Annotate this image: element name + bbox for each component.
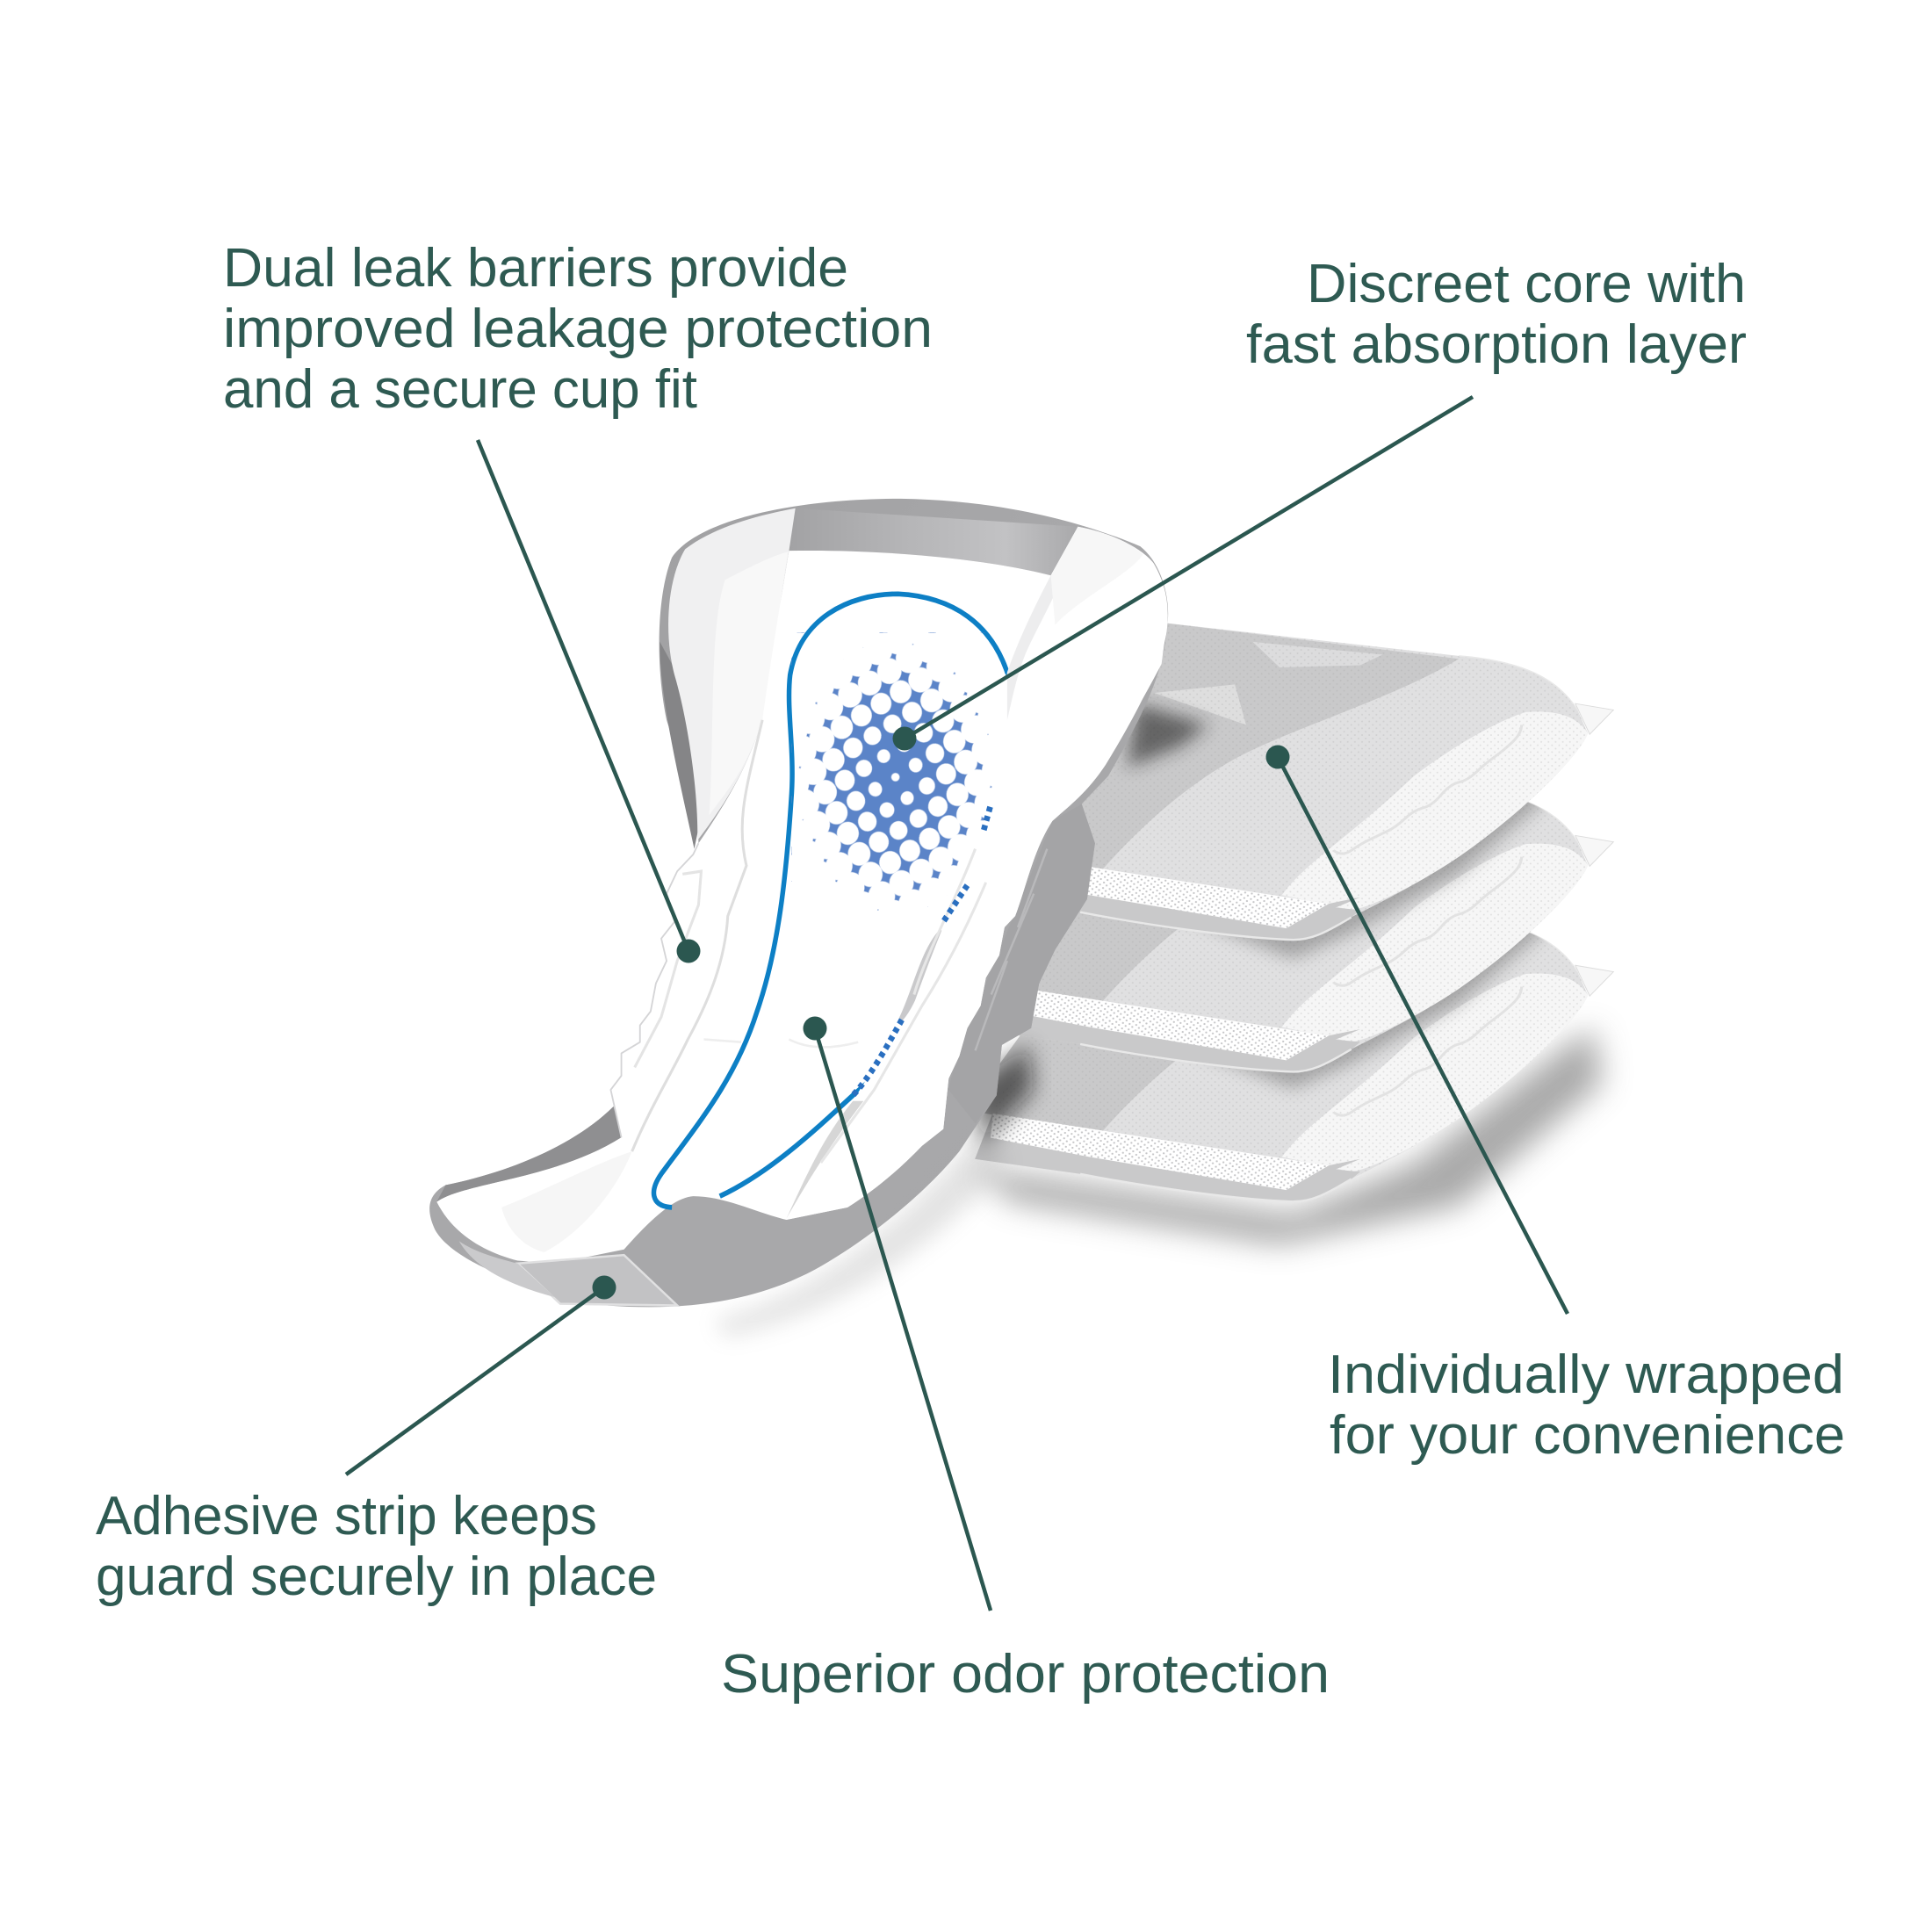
text: dual leak barriers: improved leakage protection	[223, 299, 933, 359]
left back flap	[668, 508, 796, 840]
text: adhesive strip	[96, 1486, 657, 1607]
callout: adhesive strip	[96, 1275, 657, 1607]
left dark inner strip	[660, 642, 701, 849]
text: discreet core: Discreet core with	[1307, 254, 1746, 314]
body folds	[501, 1151, 632, 1252]
text: adhesive strip: guard securely in place	[96, 1546, 657, 1607]
adhesive strip panel	[517, 1255, 677, 1306]
guard outer grey shell	[429, 499, 1168, 1307]
left barrier scalloped edge	[610, 843, 698, 1137]
leader line: discreet core	[892, 397, 1473, 750]
text: dual leak barriers: and a secure cup fit	[223, 359, 697, 420]
text: discreet core: fast absorption layer	[1246, 314, 1747, 375]
illustration: stack of individually wrapped guards	[966, 623, 1613, 1244]
text: individually wrapped	[1328, 1344, 1845, 1466]
text: adhesive strip: Adhesive strip keeps	[96, 1486, 597, 1546]
text: individually wrapped: for your convenience	[1330, 1405, 1845, 1466]
callout: discreet core	[892, 254, 1747, 750]
text: odor protection: Superior odor protection	[721, 1644, 1330, 1705]
blue halftone absorption zone	[791, 633, 999, 921]
top grey band	[789, 508, 1078, 575]
leader line: adhesive strip	[346, 1275, 616, 1474]
text: discreet core	[1246, 254, 1747, 375]
blue outline of absorbent core	[654, 594, 1020, 1208]
toe highlight	[459, 1241, 555, 1297]
white body	[436, 527, 1168, 1264]
text: individually wrapped: Individually wrapped	[1328, 1344, 1844, 1405]
callout: dual leak barriers	[223, 238, 933, 962]
infographic: guard features	[96, 247, 1842, 1704]
shell highlight	[948, 804, 1095, 1123]
dark sliver above toe	[436, 1107, 622, 1202]
leader line: dual leak barriers	[478, 440, 701, 962]
text: dual leak barriers	[223, 238, 933, 420]
callout: individually wrapped	[1266, 745, 1845, 1466]
leader line: odor protection	[803, 1017, 991, 1611]
callout: odor protection	[721, 1017, 1330, 1705]
text: dual leak barriers: Dual leak barriers provide	[223, 238, 848, 299]
leader line: individually wrapped	[1266, 745, 1568, 1314]
right leak barrier	[786, 527, 1167, 1220]
illustration: open guard with blue core	[429, 499, 1168, 1337]
blue core peeking past barrier	[853, 807, 991, 1095]
